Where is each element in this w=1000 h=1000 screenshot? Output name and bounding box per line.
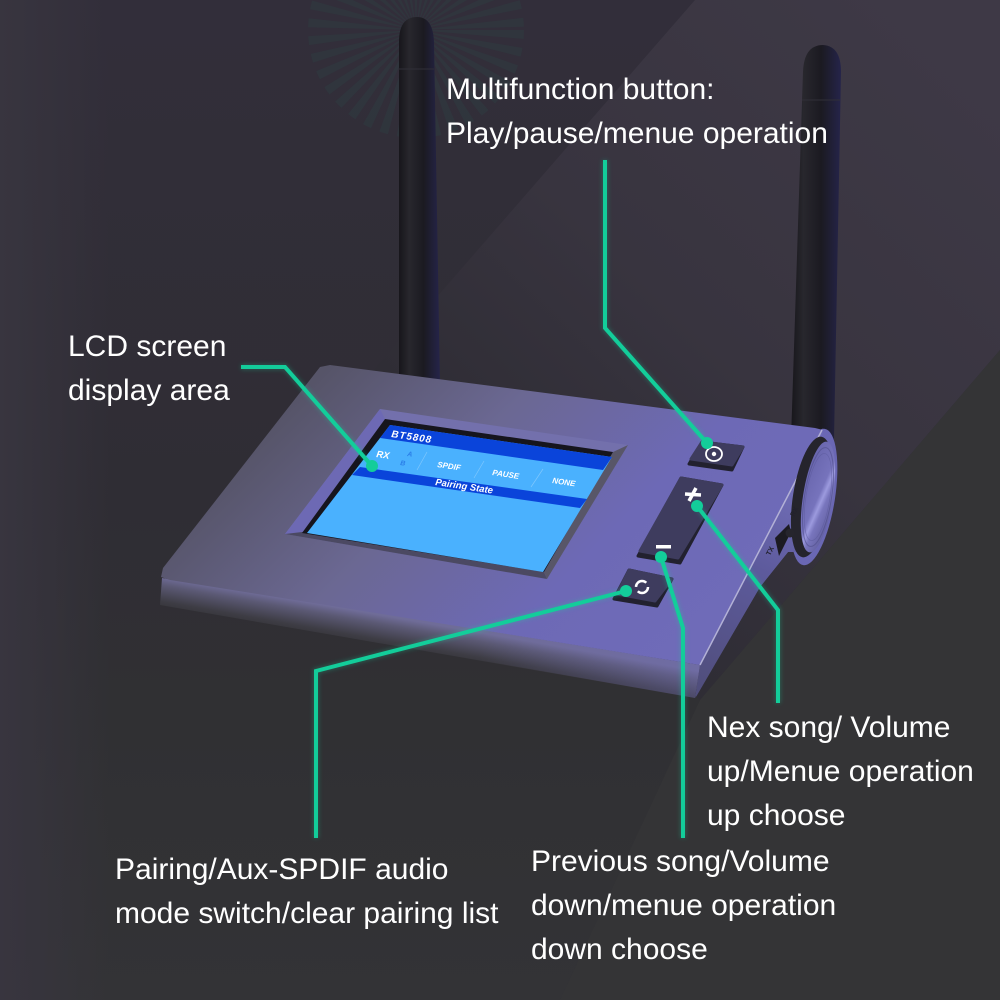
label: next song bbox=[707, 711, 974, 832]
side switch: TX bbox=[766, 545, 776, 557]
top face bbox=[161, 365, 823, 665]
label: pairing: Pairing/Aux-SPDIF audio bbox=[115, 853, 448, 886]
button: multifunction bbox=[689, 442, 743, 470]
side switch: RX bbox=[790, 506, 800, 518]
screen text: B bbox=[400, 460, 406, 468]
label: pairing bbox=[115, 853, 498, 930]
right antenna bbox=[791, 45, 841, 440]
device body bbox=[160, 365, 846, 698]
callout line: LCD bbox=[241, 367, 378, 472]
screen text: SPDIF bbox=[437, 460, 462, 473]
label: previous song: Previous song/Volume bbox=[531, 845, 830, 878]
callout line: pairing bbox=[316, 585, 632, 838]
label: multifunction button: Multifunction button: bbox=[446, 73, 714, 106]
label: previous song bbox=[531, 845, 836, 966]
side switch bbox=[766, 506, 800, 557]
screen text: RX bbox=[376, 449, 391, 462]
label: multifunction button bbox=[446, 73, 828, 150]
radial ray emblem bbox=[356, 0, 476, 90]
side panel bbox=[695, 428, 823, 698]
knob bbox=[784, 434, 842, 560]
knob rim bbox=[782, 426, 846, 568]
LCD screen bbox=[285, 409, 628, 579]
label: next song: up/Menue operation bbox=[707, 755, 974, 788]
display bbox=[302, 419, 613, 572]
screen text: BT5808 bbox=[391, 429, 433, 446]
label: next song: up choose bbox=[707, 799, 845, 832]
screen text: Pairing State bbox=[435, 477, 494, 497]
front panel bbox=[160, 578, 700, 698]
side panel upper bbox=[696, 432, 823, 697]
label: LCD screen: LCD screen bbox=[68, 330, 226, 363]
callout line: next song bbox=[691, 500, 778, 703]
label: pairing: mode switch/clear pairing list bbox=[115, 897, 498, 930]
screen text bbox=[376, 429, 577, 497]
label: previous song: down choose bbox=[531, 933, 708, 966]
callout line glow bbox=[241, 160, 778, 838]
button: plus minus bbox=[638, 478, 722, 563]
label: LCD screen bbox=[68, 330, 230, 407]
label: next song: Nex song/ Volume bbox=[707, 711, 950, 744]
left antenna bbox=[399, 17, 440, 385]
button: cycle bbox=[614, 570, 672, 606]
screen text: PAUSE bbox=[492, 468, 520, 481]
label: multifunction button: Play/pause/menue operation bbox=[446, 117, 828, 150]
label: previous song: down/menue operation bbox=[531, 889, 836, 922]
bezel bbox=[285, 409, 628, 579]
screen text: A bbox=[406, 451, 413, 459]
callout line: multifunction bbox=[605, 160, 713, 449]
callout line: previous song bbox=[655, 551, 683, 838]
side edge highlight bbox=[700, 430, 822, 665]
screen text: NONE bbox=[552, 476, 577, 488]
screen dividers bbox=[417, 452, 543, 487]
label: LCD screen: display area bbox=[68, 374, 230, 407]
